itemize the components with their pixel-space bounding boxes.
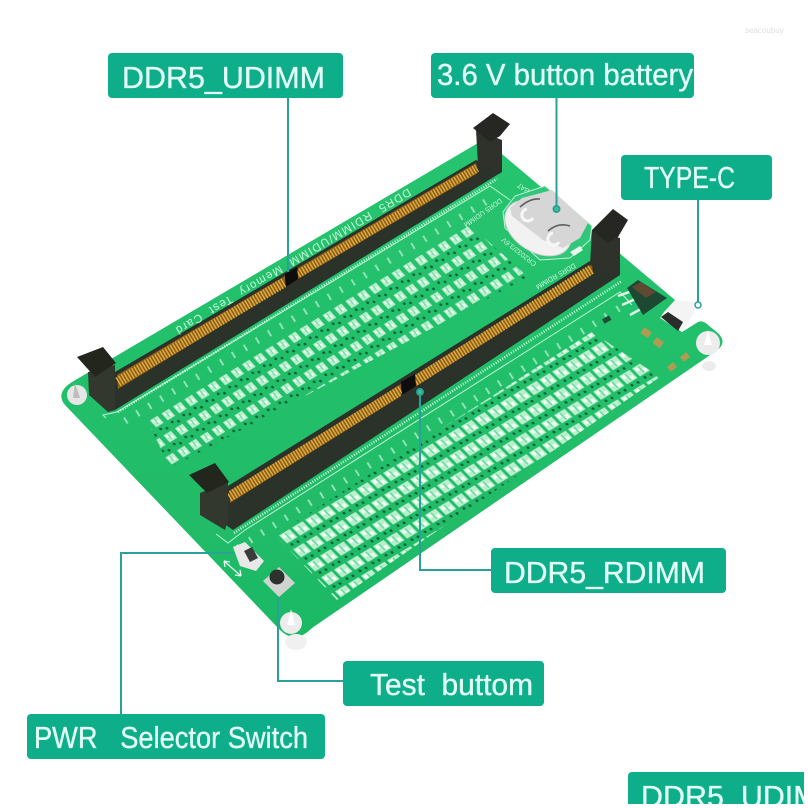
component: USB type-C connector xyxy=(660,300,695,332)
silkscreen outlines xyxy=(103,186,632,543)
regulator pins xyxy=(618,291,648,315)
watermark: seacoubuy xyxy=(745,26,784,35)
left post xyxy=(67,383,87,405)
component: RDIMM slot xyxy=(189,209,628,530)
switch knob xyxy=(244,547,258,562)
connector shell xyxy=(660,300,695,332)
center key xyxy=(401,374,416,395)
component: voltage regulator xyxy=(618,280,667,315)
gold contacts xyxy=(229,384,401,503)
switch base xyxy=(233,542,264,571)
line: type-C xyxy=(695,200,701,308)
label: Test buttom: Test buttom xyxy=(370,667,533,702)
line: UDIMM xyxy=(287,98,289,272)
label: clipped DDR5_UDIMM xyxy=(628,772,804,804)
right latch xyxy=(476,130,502,172)
left latch xyxy=(200,482,228,530)
metal clip xyxy=(510,190,588,248)
lower test pad grid xyxy=(270,325,665,605)
label: TYPE-C: TYPE-C xyxy=(644,160,735,195)
clip slots xyxy=(520,199,570,231)
regulator body xyxy=(627,280,667,315)
battery disc xyxy=(495,189,581,267)
button cap xyxy=(270,570,284,584)
line: battery xyxy=(554,98,560,212)
silkscreen labels: DDR5 UDIMM xyxy=(462,196,503,228)
bottom post xyxy=(280,609,307,650)
silkscreen labels: CR2032/3.6V xyxy=(501,235,538,267)
connector opening xyxy=(661,312,683,331)
line: test button xyxy=(278,597,343,681)
right post xyxy=(696,330,720,371)
center key xyxy=(285,267,298,287)
silkscreen labels: BAT xyxy=(516,180,531,194)
component: power slide switch xyxy=(224,542,264,576)
upper test pad grid xyxy=(150,226,525,466)
label: 3.6 V button battery: 3.6 V button battery xyxy=(437,57,693,92)
pin labels under slots xyxy=(125,198,624,548)
board outline xyxy=(61,141,723,637)
pin row ticks xyxy=(118,179,622,533)
silkscreen labels xyxy=(462,180,576,290)
battery outline xyxy=(503,186,592,260)
battery contact xyxy=(570,246,583,256)
label: DDR5_RDIMM xyxy=(491,548,726,593)
gold contacts xyxy=(117,276,285,389)
left latch xyxy=(88,365,115,412)
label: DDR5_RDIMM: DDR5_RDIMM xyxy=(504,555,705,590)
slot body xyxy=(105,160,502,412)
switch direction arrow xyxy=(224,561,241,576)
circuit board xyxy=(61,113,723,650)
slot body xyxy=(226,261,620,530)
label: PWR Selector Switch: PWR Selector Switch xyxy=(34,720,308,755)
label: DDR5_UDIMM xyxy=(108,53,343,98)
label: TYPE-C xyxy=(621,155,772,200)
callout lines xyxy=(121,98,701,714)
component: UDIMM slot xyxy=(77,113,510,412)
silkscreen title: DDR5 RDIMM/UDIMM Memory Test Card xyxy=(173,185,413,336)
label: Test buttom xyxy=(343,661,544,706)
right latch xyxy=(590,230,620,275)
line: power switch xyxy=(121,553,234,714)
component: coin battery holder xyxy=(495,186,592,267)
component: test button xyxy=(263,567,295,597)
small components xyxy=(602,315,690,372)
button base xyxy=(263,567,295,597)
label: DDR5_UDIMM: DDR5_UDIMM xyxy=(122,60,325,95)
mounting posts xyxy=(67,330,720,650)
line: RDIMM xyxy=(417,389,491,570)
silkscreen labels: DDR5 RDIMM xyxy=(534,261,576,290)
